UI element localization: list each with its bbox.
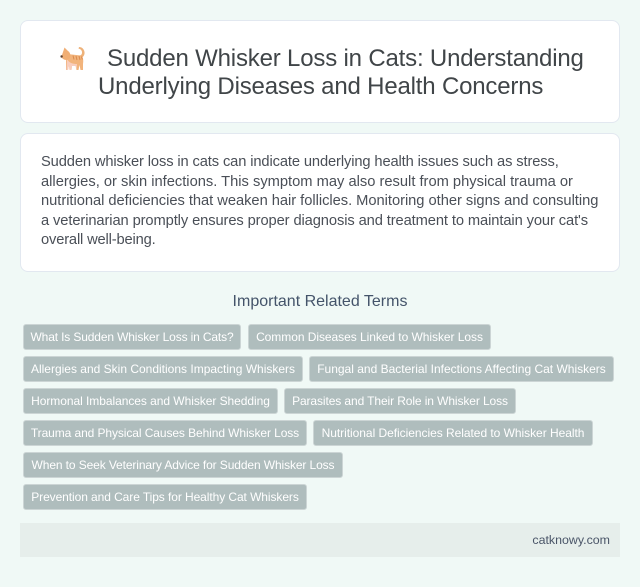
tag: What Is Sudden Whisker Loss in Cats? [30, 330, 234, 344]
heading: related terms: Important Related Terms [233, 293, 407, 310]
footer site name: catknowy.com [532, 533, 610, 547]
description text: a veterinarian promptly ensures proper diagnosis and treatment to maintain your cat's [41, 212, 588, 228]
title line 1: Sudden Whisker Loss in Cats: Understanding [107, 45, 584, 72]
tag [23, 324, 241, 350]
description text: allergies, or skin infections. This symptom may also result from physical trauma or [41, 174, 573, 190]
tag [23, 452, 343, 478]
tag: When to Seek Veterinary Advice for Sudden Whisker Loss [32, 458, 334, 472]
tag: Common Diseases Linked to Whisker Loss [256, 330, 483, 344]
tag: Hormonal Imbalances and Whisker Shedding [31, 394, 270, 408]
tag: Nutritional Deficiencies Related to Whisker Health [322, 426, 584, 440]
footer bar [20, 523, 620, 557]
panel: header card [20, 20, 620, 123]
description text: nutritional deficiencies that weaken hair follicles. Monitoring other signs and consulting [41, 193, 598, 209]
tags: related terms [23, 324, 614, 510]
description text [41, 154, 598, 248]
tag [248, 324, 491, 350]
panel: description card [20, 133, 620, 272]
icon: cat [60, 47, 85, 70]
description text: overall well-being. [41, 232, 156, 248]
tag [23, 356, 303, 382]
tag [23, 484, 307, 510]
tag: Allergies and Skin Conditions Impacting Whiskers [31, 362, 295, 376]
tag [23, 420, 307, 446]
tag: Fungal and Bacterial Infections Affecting Cat Whiskers [317, 362, 606, 376]
tag [309, 356, 614, 382]
tag [284, 388, 516, 414]
tag [23, 388, 278, 414]
tag: Parasites and Their Role in Whisker Loss [292, 394, 508, 408]
tag: Trauma and Physical Causes Behind Whisker Loss [31, 426, 299, 440]
title line 2: Underlying Diseases and Health Concerns [98, 73, 543, 100]
description text: Sudden whisker loss in cats can indicate underlying health issues such as stress, [41, 154, 559, 170]
tag: Prevention and Care Tips for Healthy Cat Whiskers [31, 490, 299, 504]
tag [313, 420, 593, 446]
